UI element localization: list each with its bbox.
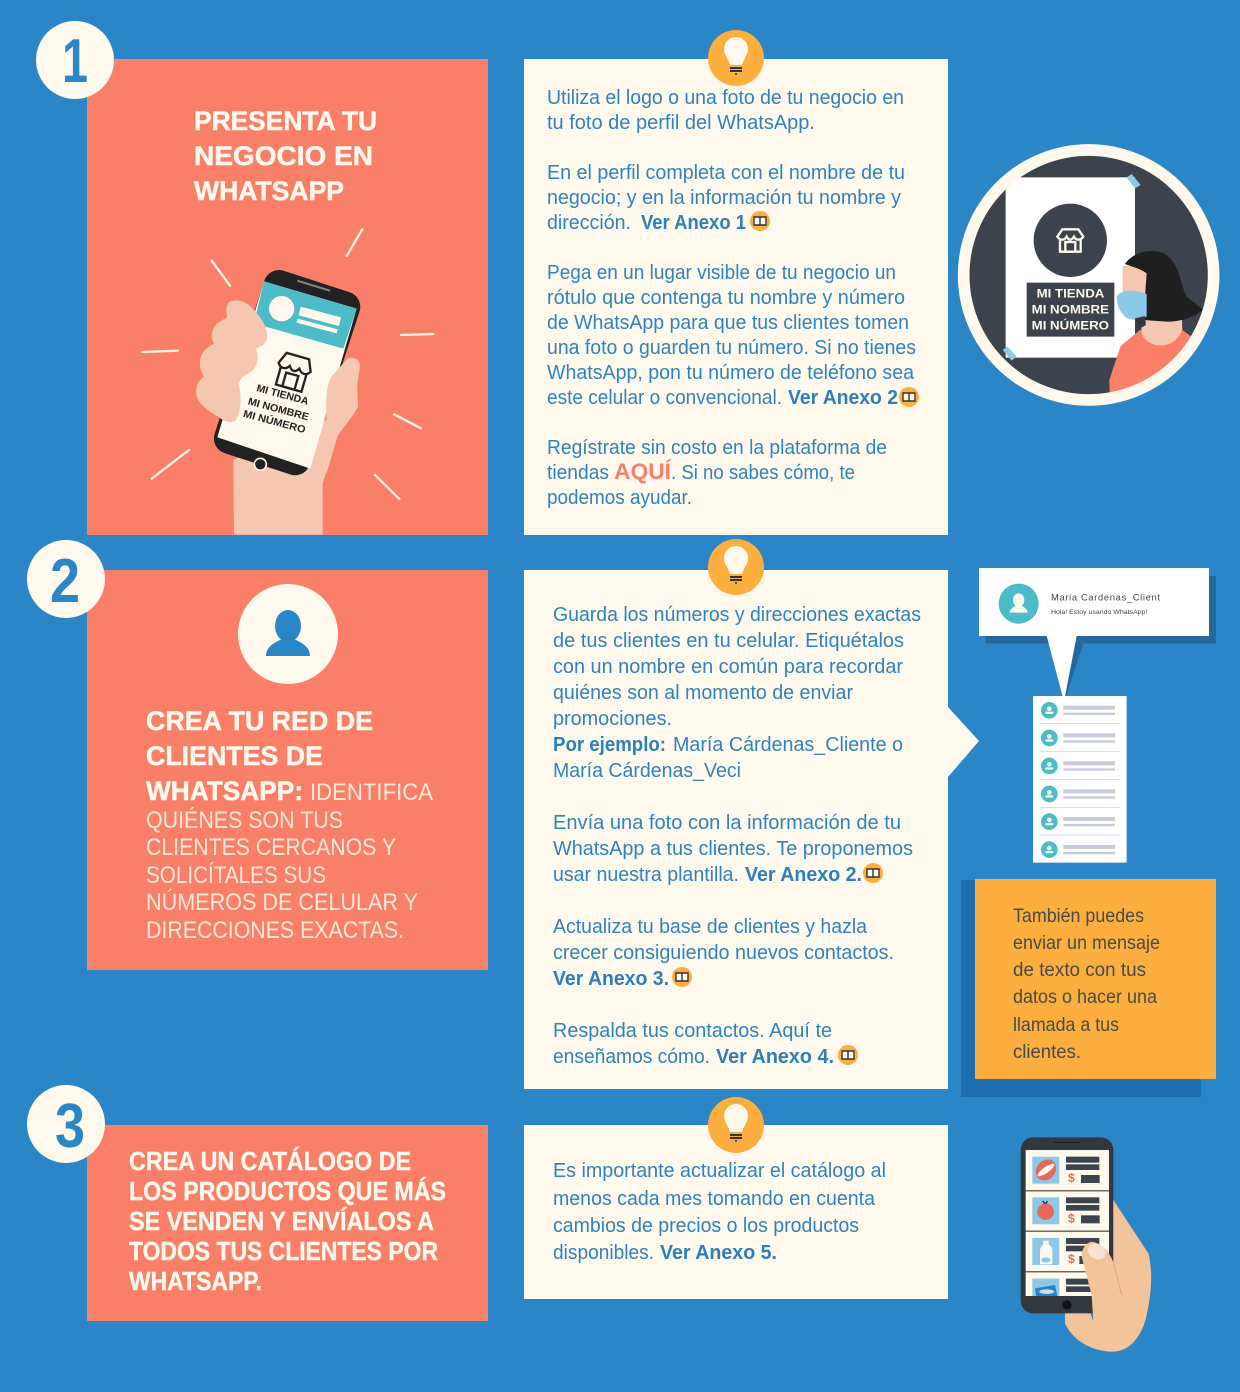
icon: light bulb 3 [708, 1097, 764, 1153]
icon: light bulb 2 [708, 539, 764, 595]
number badge 1: 1 [62, 27, 88, 96]
text block: update base: crecer consiguiendo nuevos contactos. [553, 942, 894, 964]
heading: presenta tu negocio: PRESENTA TU [194, 106, 377, 136]
number badge 2: 2 [50, 547, 80, 616]
icon: book 2 [899, 387, 919, 407]
contact name: Maria Cardenas_Client [1051, 593, 1160, 603]
text block: update base [553, 916, 894, 990]
text block: complete profile [547, 162, 905, 234]
callout: orange note: de texto con tus [1013, 959, 1146, 981]
text block: send photo: WhatsApp a tus clientes. Te proponemos [553, 838, 913, 860]
text block: save numbers: María Cárdenas_Cliente o [673, 734, 903, 756]
number badge 2 [27, 540, 105, 618]
callout: orange note: También puedes [1013, 905, 1144, 927]
text block: identify clients [146, 779, 433, 944]
callout: orange note: datos o hacer una [1013, 986, 1157, 1008]
text block: update base: Actualiza tu base de clientes y hazla [553, 916, 868, 938]
text block: profile: tu foto de perfil del WhatsApp. [547, 112, 815, 134]
number badge 3: 3 [55, 1092, 85, 1161]
panel: step 3 text: menos cada mes tomando en cuenta [553, 1188, 876, 1210]
heading: crea tu red [146, 706, 373, 806]
text block: register: tiendas [547, 462, 609, 484]
heading: presenta tu negocio: WHATSAPP [194, 176, 344, 206]
text block: identify clients: QUIÉNES SON TUS [146, 807, 343, 834]
icon: store [273, 351, 314, 393]
product: can [1035, 1285, 1057, 1296]
icon: book 3 [863, 863, 883, 883]
text block: register: Regístrate sin costo en la plataforma de [547, 437, 887, 459]
text block: complete profile: En el perfil completa con el nombre de tu [547, 162, 905, 184]
product: apple [1037, 1201, 1054, 1220]
text block: sign: una foto o guarden tu número. Si no tienes [547, 337, 916, 359]
text block: backup: enseñamos cómo. [553, 1046, 710, 1068]
callout: orange note [961, 879, 1216, 1097]
heading: crea tu red: WHATSAPP: [146, 776, 303, 806]
panel: step 3 text [524, 1125, 948, 1299]
text block: save numbers: de tus clientes en tu celular. Etiquétalos [553, 630, 904, 652]
woman [1109, 250, 1202, 392]
text block: save numbers: quiénes son al momento de enviar [553, 682, 853, 704]
text block: backup: Ver Anexo 4. [716, 1046, 834, 1068]
text block: save numbers: María Cárdenas_Veci [553, 760, 741, 782]
panel: step 3 text: cambios de precios o los productos [553, 1215, 859, 1237]
text block: update base: Ver Anexo 3. [553, 968, 669, 990]
text block: sign: Pega en un lugar visible de tu negocio un [547, 262, 896, 284]
panel: step 3 heading: WHATSAPP. [129, 1266, 262, 1296]
icon: book 5 [838, 1045, 858, 1065]
sign label: MI NÚMERO [1032, 317, 1109, 332]
panel: step 3 text: disponibles. [553, 1242, 654, 1264]
icon: user circle [238, 584, 338, 684]
text block: sign: de WhatsApp para que tus clientes tomen [547, 312, 909, 334]
phone text: MI NOMBRE [247, 397, 310, 423]
text block: complete profile: negocio; y en la información tu nombre y [547, 187, 901, 209]
text block: identify clients: NÚMEROS DE CELULAR Y [146, 889, 418, 916]
hand thumb [320, 358, 360, 473]
heading: presenta tu negocio: NEGOCIO EN [194, 141, 373, 171]
panel: step 2 heading [87, 570, 488, 970]
text block: sign: Ver Anexo 2 [788, 387, 898, 409]
phone text: MI TIENDA [255, 383, 310, 408]
text block: identify clients: DIRECCIONES EXACTAS. [146, 917, 404, 944]
panel: step 3 text: Ver Anexo 5. [660, 1242, 777, 1264]
text block: send photo: Envía una foto con la información de tu [553, 812, 901, 834]
contact rows [1040, 702, 1120, 858]
text block: sign: rótulo que contenga tu nombre y número [547, 287, 905, 309]
phone text: MI NÚMERO [242, 407, 307, 436]
illustration: phone with catalog in hand: $ [1068, 1252, 1075, 1266]
panel: step 3 heading: CREA UN CATÁLOGO DE [129, 1146, 411, 1176]
product: meat [1032, 1155, 1060, 1185]
icon: light bulb 1 [708, 30, 764, 86]
hand [1065, 1200, 1151, 1352]
callout: orange note: enviar un mensaje [1013, 932, 1160, 954]
text block: identify clients: CLIENTES CERCANOS Y [146, 834, 396, 861]
text block: send photo [553, 812, 913, 886]
text block: save numbers: promociones. [553, 708, 672, 730]
text block: complete profile: Ver Anexo 1 [641, 212, 746, 234]
sign label: MI TIENDA [1037, 286, 1104, 300]
icon: book 4 [672, 967, 692, 987]
text block: register [547, 437, 887, 509]
text block: register: podemos ayudar. [547, 487, 692, 509]
text block: register: AQUÍ [614, 459, 672, 484]
icon: store [1057, 229, 1083, 252]
illustration: poster and woman with mask [964, 150, 1214, 403]
panel: step 1 text [524, 59, 948, 535]
text block: sign: este celular o convencional. [547, 387, 782, 409]
contact message: Hola! Estoy usando WhatsApp! [1051, 609, 1148, 616]
panel: step 2 text [524, 570, 979, 1089]
illustration: hand holding phone [142, 229, 433, 535]
heading: crea tu red: CLIENTES DE [146, 741, 323, 771]
panel: step 3 heading: LOS PRODUCTOS QUE MÁS [129, 1176, 446, 1206]
illustration: phone with catalog in hand: $ [1068, 1171, 1075, 1185]
contact avatar [999, 584, 1039, 624]
sign label: MI NOMBRE [1032, 302, 1109, 316]
panel: step 3 text: Es importante actualizar el catálogo al [553, 1160, 886, 1182]
sign label [1027, 283, 1114, 337]
text block: sign: WhatsApp, pon tu número de teléfono sea [547, 362, 915, 384]
text block: sign [547, 262, 916, 409]
text block: send photo: usar nuestra plantilla. [553, 864, 739, 886]
heading: crea tu red: CREA TU RED DE [146, 706, 373, 736]
heading: presenta tu negocio [194, 106, 377, 206]
panel: step 3 heading: SE VENDEN Y ENVÍALOS A [129, 1206, 434, 1236]
illustration: contact bubble and list [979, 568, 1216, 863]
text block: profile: Utiliza el logo o una foto de tu negocio en [547, 87, 904, 109]
text block: identify clients: IDENTIFICA [310, 779, 433, 806]
callout: orange note: llamada a tus [1013, 1014, 1119, 1036]
phone text [242, 383, 310, 436]
number badge 3 [27, 1085, 105, 1163]
text block: identify clients: SOLICÍTALES SUS [146, 862, 326, 889]
text block: save numbers: Por ejemplo: [553, 734, 666, 756]
panel: step 1 heading [87, 59, 488, 535]
callout: orange note: clientes. [1013, 1041, 1081, 1063]
product: bottle [1040, 1241, 1052, 1264]
panel: step 3 heading: TODOS TUS CLIENTES POR [129, 1236, 438, 1266]
illustration: phone with catalog in hand: $ [1068, 1211, 1075, 1225]
hand fingers [196, 300, 267, 422]
text block: backup [553, 1020, 834, 1068]
text block: register: . Si no sabes cómo, te [671, 462, 855, 484]
illustration: phone with catalog in hand [1021, 1137, 1151, 1352]
text block: save numbers [553, 604, 921, 782]
text block: backup: Respalda tus contactos. Aquí te [553, 1020, 832, 1042]
arrow: chevron to contacts [948, 707, 979, 777]
icon: book 1 [750, 211, 770, 231]
text block: save numbers: con un nombre en común para recordar [553, 656, 903, 678]
text block: send photo: Ver Anexo 2. [745, 864, 862, 886]
number badge 1 [36, 21, 114, 99]
panel: step 3 heading [87, 1125, 488, 1321]
text block: complete profile: dirección. [547, 212, 631, 234]
text block: profile [547, 87, 904, 134]
text block: save numbers: Guarda los números y direcciones exactas [553, 604, 921, 626]
